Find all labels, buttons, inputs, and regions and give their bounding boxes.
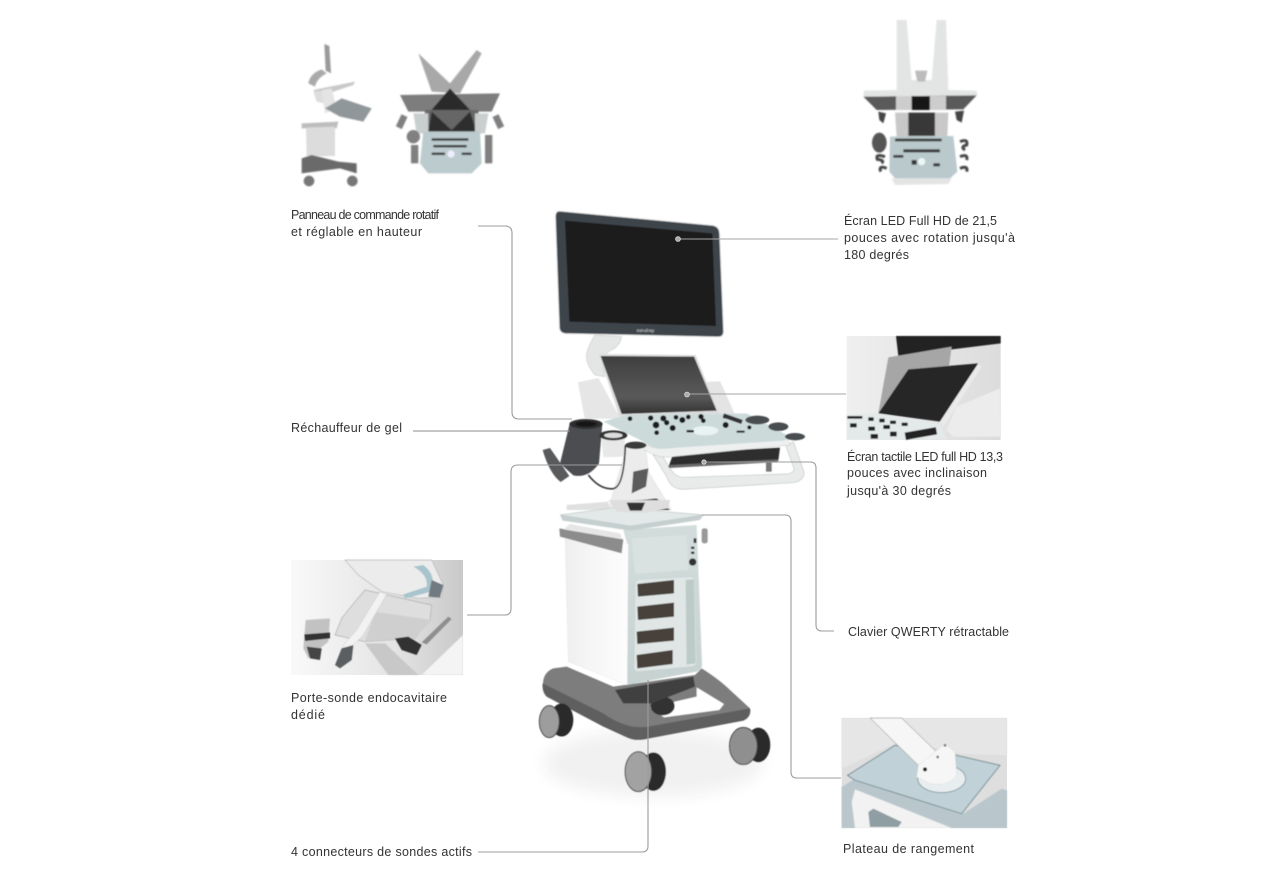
label: clavier QWERTY: Clavier QWERTY rétractable bbox=[848, 625, 1009, 639]
label: porte-sonde: Porte-sonde endocavitaire bbox=[291, 691, 447, 705]
label: écran tactile: Écran tactile LED full HD 13,3 bbox=[847, 449, 1003, 464]
leader line: clavier QWERTY bbox=[702, 460, 834, 631]
cabinet front bbox=[623, 525, 702, 685]
leader line: connecteurs bbox=[478, 680, 648, 852]
connectors bbox=[637, 580, 674, 668]
power controls bbox=[689, 558, 696, 566]
base opening bbox=[650, 687, 724, 717]
label: écran LED Full HD bbox=[844, 213, 1015, 262]
label: écran tactile: pouces avec inclinaison bbox=[847, 466, 987, 480]
leader line: panneau de commande bbox=[478, 226, 572, 419]
label: écran LED Full HD: Écran LED Full HD de 21,5 bbox=[844, 213, 997, 228]
label: panneau de commande rotatif: Panneau de commande rotatif bbox=[291, 208, 440, 222]
side view bbox=[302, 44, 372, 186]
label: écran tactile: jusqu'à 30 degrés bbox=[846, 484, 951, 498]
photo: main ultrasound system upper part: mindray bbox=[637, 328, 655, 334]
label: plateau de rangement: Plateau de rangement bbox=[843, 842, 975, 856]
leader line: porte-sonde bbox=[467, 465, 622, 615]
label: écran tactile bbox=[846, 449, 1003, 498]
console buttons bbox=[628, 414, 751, 435]
label: écran LED Full HD: pouces avec rotation jusqu'à bbox=[844, 231, 1015, 245]
front view with rotating screens bbox=[396, 50, 504, 173]
rear panels bbox=[578, 378, 620, 418]
leader line: plateau de rangement bbox=[702, 515, 841, 778]
photo: endocavity probe holder bbox=[291, 560, 463, 675]
console rim bbox=[640, 437, 791, 457]
cabinet side bbox=[565, 530, 628, 685]
photo: rotating control panel views bbox=[302, 44, 504, 186]
touch screen bbox=[599, 354, 719, 417]
photo: main ultrasound system lower part bbox=[539, 500, 770, 797]
label: porte-sonde bbox=[291, 691, 447, 722]
connector bay bbox=[634, 577, 697, 672]
photo: tilting touch screen bbox=[847, 336, 1001, 440]
probe pods bbox=[745, 416, 805, 440]
side handle bbox=[559, 528, 623, 553]
keyboard tray bbox=[668, 448, 780, 467]
storage tray bbox=[560, 507, 703, 526]
label: panneau de commande rotatif: et réglable en hauteur bbox=[291, 225, 422, 239]
photo: storage tray bbox=[842, 718, 1007, 828]
base underside bbox=[615, 677, 695, 703]
endocavity probe bbox=[543, 448, 569, 482]
label: porte-sonde: dédié bbox=[291, 708, 325, 722]
leader line: réchauffeur de gel bbox=[413, 430, 570, 432]
label: connecteurs de sondes: 4 connecteurs de sondes actifs bbox=[291, 845, 472, 859]
base bbox=[543, 667, 750, 740]
cups bbox=[601, 436, 625, 457]
photo: monitor rotation view bbox=[863, 20, 977, 185]
monitor arm bbox=[586, 335, 622, 377]
handle bbox=[653, 442, 804, 489]
photo: main ultrasound system upper part bbox=[543, 211, 805, 510]
floor reflection bbox=[543, 730, 763, 797]
gel warmer bbox=[560, 423, 602, 476]
leader line: écran LED bbox=[676, 237, 838, 241]
leader line: écran tactile bbox=[685, 392, 846, 397]
label: écran LED Full HD: 180 degrés bbox=[844, 248, 909, 262]
label: panneau de commande rotatif bbox=[291, 208, 440, 239]
label: réchauffeur de gel: Réchauffeur de gel bbox=[291, 421, 402, 435]
wheels bbox=[539, 703, 770, 792]
rear wheel bbox=[651, 697, 675, 715]
monitor bbox=[555, 211, 724, 337]
cable bbox=[588, 445, 625, 489]
column bbox=[608, 448, 672, 510]
console surface bbox=[603, 413, 788, 449]
